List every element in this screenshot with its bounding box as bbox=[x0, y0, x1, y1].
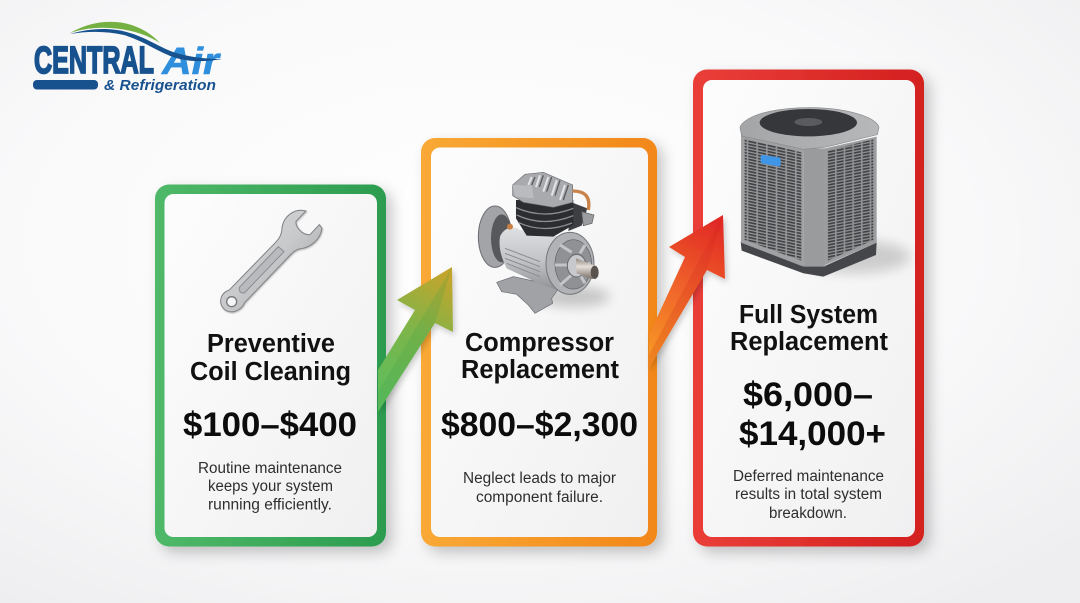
panel: preventive coil cleaning bbox=[155, 184, 386, 546]
price: $6,000– bbox=[743, 376, 873, 414]
price: $14,000+ bbox=[739, 415, 886, 453]
card interior bbox=[703, 80, 915, 537]
heading bbox=[730, 301, 888, 356]
icon: wrench bbox=[221, 210, 322, 312]
price bbox=[739, 376, 886, 453]
card interior bbox=[431, 148, 648, 537]
description: running efficiently. bbox=[208, 496, 332, 514]
heading: Replacement bbox=[461, 356, 619, 384]
description bbox=[733, 468, 884, 522]
heading: Full System bbox=[739, 301, 878, 329]
card frame: orange bbox=[421, 138, 657, 546]
logo: CENTRAL wordmark: CENTRAL bbox=[34, 40, 154, 82]
heading: Replacement bbox=[730, 328, 888, 356]
description: Routine maintenance bbox=[198, 460, 342, 477]
price: $100–$400 bbox=[183, 406, 357, 444]
heading bbox=[190, 330, 351, 386]
heading: Coil Cleaning bbox=[190, 358, 351, 386]
logo: bar bbox=[33, 80, 98, 90]
logo: green swoosh bbox=[70, 22, 160, 43]
description: keeps your system bbox=[208, 478, 333, 495]
description: component failure. bbox=[476, 489, 603, 506]
icon: compressor bbox=[478, 172, 610, 313]
price: $800–$2,300 bbox=[441, 406, 638, 444]
logo: blue swoosh bbox=[70, 29, 222, 61]
panel: full system replacement bbox=[693, 70, 924, 546]
panel: compressor replacement bbox=[421, 138, 657, 546]
description: Deferred maintenance bbox=[733, 468, 884, 485]
logo: & Refrigeration: & Refrigeration bbox=[104, 77, 216, 94]
description: breakdown. bbox=[769, 505, 847, 522]
arrow: green to orange bbox=[378, 267, 453, 412]
card interior bbox=[164, 194, 377, 537]
description: results in total system bbox=[735, 486, 882, 503]
heading bbox=[461, 329, 619, 384]
description: Neglect leads to major bbox=[463, 470, 616, 487]
arrow: orange to red bbox=[649, 215, 725, 368]
description bbox=[463, 470, 616, 506]
card frame: red bbox=[693, 70, 924, 546]
logo: Air wordmark: Air bbox=[161, 41, 221, 83]
heading: Compressor bbox=[465, 329, 614, 357]
card frame: green bbox=[155, 184, 386, 546]
logo: Central Air & Refrigeration bbox=[33, 22, 222, 94]
icon: condenser unit bbox=[740, 108, 910, 277]
heading: Preventive bbox=[207, 330, 335, 358]
description bbox=[198, 460, 342, 514]
